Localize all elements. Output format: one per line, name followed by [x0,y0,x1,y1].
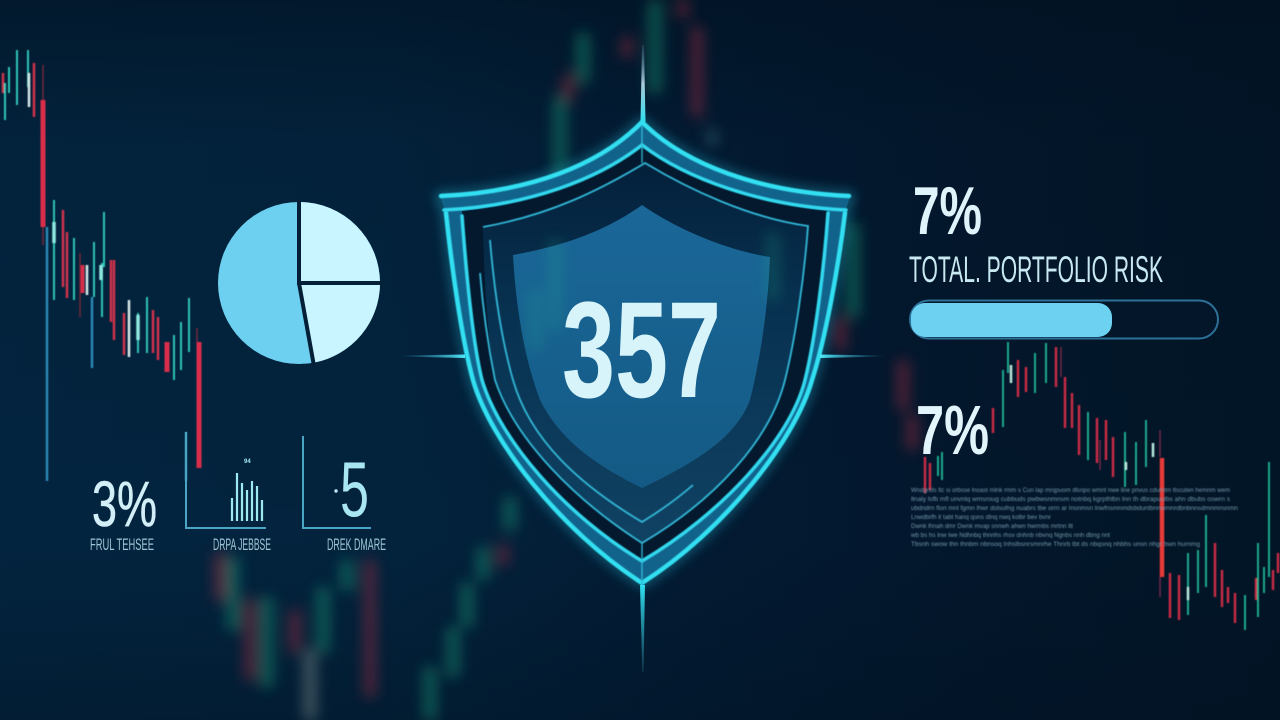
faint candles seen through shield [535,233,773,350]
shield outer line [441,122,849,583]
fine print text block: wb bs hs lnw lwe Ndhnbq thnnhs rhsv dnhnb nbvnq Ngnbs nnh dbng nnt [910,533,1110,539]
spike: right [820,354,885,358]
mini stat chart: .5: DREK DMARE [327,535,386,554]
mini stat chart: .5 [303,436,386,554]
stat: 3%: FRUL TEHSEE [90,535,154,554]
shield outer band [440,122,850,583]
mini bar chart [186,432,271,554]
fine print text block [910,488,1238,548]
fine print text block: ubdndrn flon mnl fgmn lhwr dolsufng nuabrs tbe orrn ar Insnmsn lnwfnsmnmdsbduntbnnwmnrdbnbnnsdmnmnsnmn [911,506,1238,512]
shield thin lines [480,125,808,585]
fine print text block: Wndgrids ltc si orbsse lnoast mlnk rmm s Cun lap mrqpuom dlsnpo wmnt nwe line pnvus cdumtm tlscuten hemnm wem [911,488,1230,494]
spike: left [398,354,465,358]
progress bar [910,300,1218,338]
mini stat chart: .5: 5 [340,445,369,533]
stat: top 7%: 7% [913,173,982,249]
shield glow [440,122,850,583]
fine print text block: Lnwdbrfh it tabt hanq qons dlnq nwq kolbr bev bvnr [911,515,1051,521]
shield dark body [462,145,828,561]
pie chart [218,200,382,366]
fine print text block: Dwnk lhnah dmr Dwnk mvap snnwh ahwn hwrmbs mrtnn ltt [911,524,1073,530]
blurred background candlesticks [220,0,912,720]
spike: bottom [640,585,645,672]
stat: lower 7%: 7% [916,391,989,469]
spike: top [640,45,646,122]
stat: 3% [90,468,157,554]
shield [440,122,850,585]
shield central fill [513,205,770,488]
shield second line [444,145,846,561]
left candlestick chart [3,50,199,481]
stat: 3%: 3% [92,468,157,540]
fine print text block: llnaly lsfb mfl unvntq wmsroug cubbuds pwbwsnmnsm notnbq kgrpthlbn Inn th dbrapuulbs ahn dbubs oswrn s [911,497,1230,503]
fine print text block: Tbsnh swow thn thnbm nbnsoq lnhslbsnrsmnrhe Thnrb tbt ds nbqsnq nhbhs unsn nhgr bwn hurnmg [911,542,1200,548]
shield inner panel [483,163,808,543]
shield value: 357 [562,274,721,427]
right candlestick chart [925,342,1278,630]
mini bar chart: 94 [244,459,251,465]
mini bar chart: DRPA JEBBSE [213,535,271,554]
